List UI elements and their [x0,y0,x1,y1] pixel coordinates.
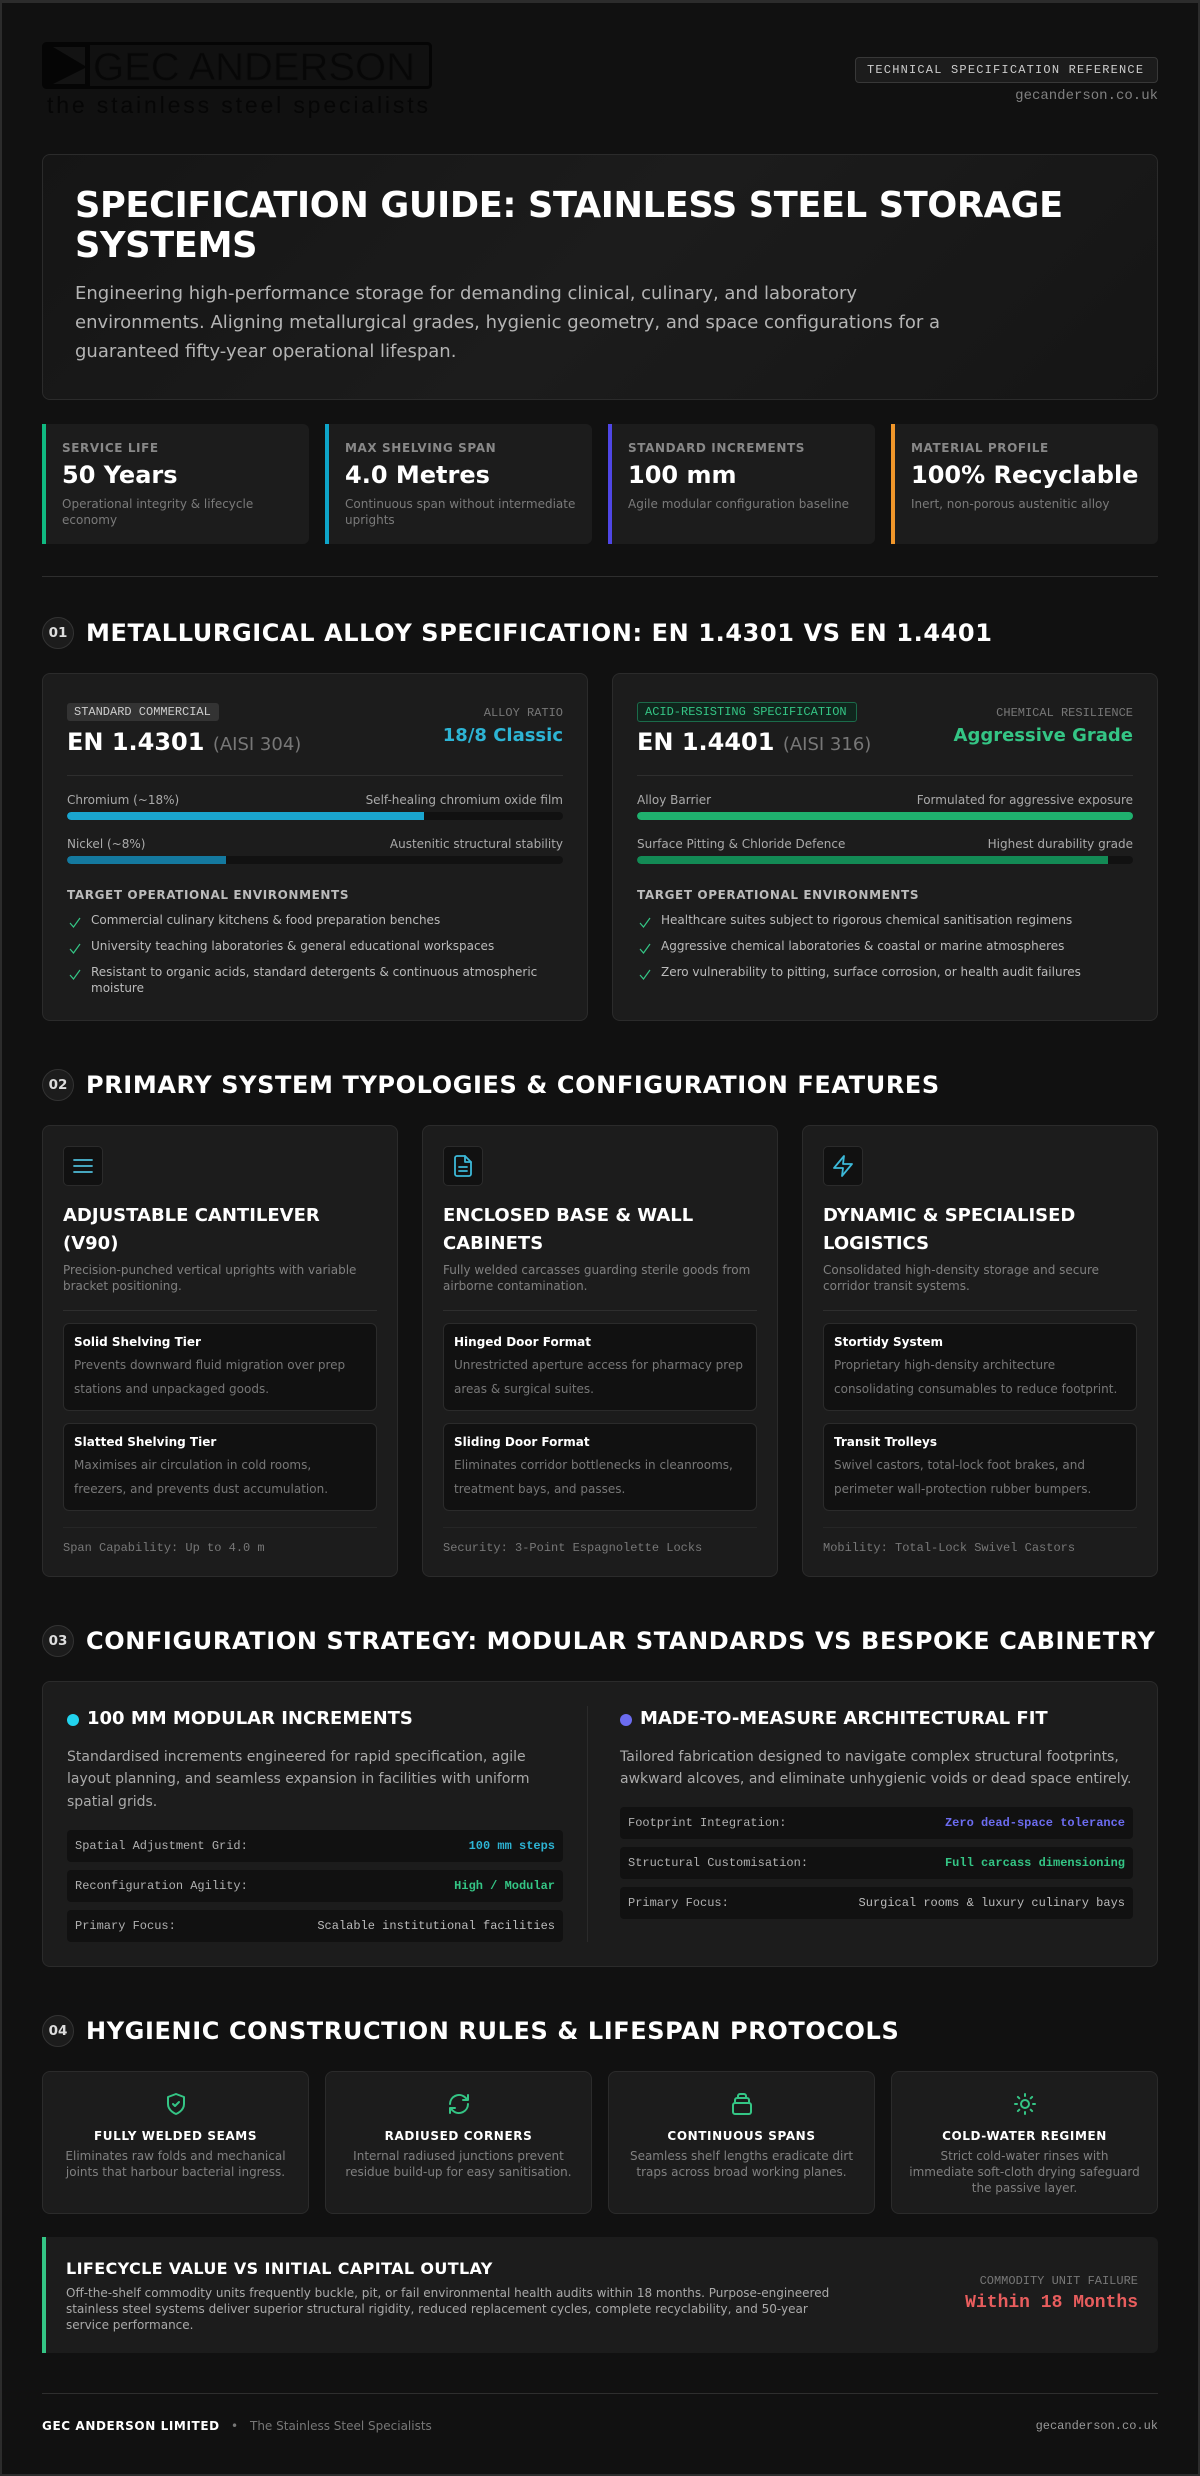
row: primary focus [67,1910,563,1942]
sub-card: solid shelving [63,1323,377,1411]
sub-card: transit trolleys: perimeter wall-protection rubber bumpers. [834,1482,1091,1496]
icon: menu lines [63,1146,103,1186]
footer tagline: The Stainless Steel Specialists [250,2419,432,2433]
panel: EN 1.4301: 18/8 Classic [443,724,563,746]
hero description: Engineering high-performance storage for demanding clinical, culinary, and laboratory [75,282,857,304]
card: continuous spans [608,2071,875,2214]
card: radiused corners: Internal radiused junctions prevent [353,2149,564,2163]
row: reconfiguration: High / Modular [454,1879,555,1893]
card: fully welded seams: joints that harbour bacterial ingress. [66,2165,285,2179]
row: structural [620,1847,1133,1879]
hero title [75,185,1063,266]
panel: EN 1.4401: Aggressive Grade [954,724,1133,746]
bar: alloy barrier: Alloy Barrier [637,793,711,807]
bar: surface pitting [637,837,1133,864]
card description: airborne contamination. [443,1279,588,1293]
sub-card: slatted shelving: Maximises air circulation in cold rooms, [74,1458,311,1472]
sub-card: stortidy: Stortidy System [834,1335,943,1349]
section heading 02: PRIMARY SYSTEM TYPOLOGIES & CONFIGURATION FEATURES [86,1071,940,1099]
bar: surface pitting: Highest durability grade [988,837,1133,851]
sub-card: solid shelving: Prevents downward fluid migration over prep [74,1358,345,1372]
card description [443,1263,750,1293]
card description: Consolidated high-density storage and secure [823,1263,1099,1277]
icon: refresh [449,2094,469,2114]
sub-card: sliding door: Sliding Door Format [454,1435,590,1449]
stat: max shelving span [325,424,592,544]
section heading 03: 03 [49,1633,67,1649]
card description: Fully welded carcasses guarding sterile goods from [443,1263,750,1277]
hero panel [42,154,1158,400]
sub-card: hinged door: Hinged Door Format [454,1335,591,1349]
modular description [67,1748,530,1810]
row: spatial adjustment: Spatial Adjustment Grid: [75,1839,248,1853]
bar: alloy barrier: Formulated for aggressive exposure [917,793,1133,807]
callout text: Off-the-shelf commodity units frequently buckle, pit, or fail environmental health audits within 18 months. Purpose-engineered [66,2286,829,2300]
stat: max shelving span: uprights [345,512,395,526]
chemical resilience: CHEMICAL RESILIENCE [996,706,1133,720]
tag: standard commercial: STANDARD COMMERCIAL [74,705,211,719]
target environments: Zero vulnerability to pitting, surface corrosion, or health audit failures [661,965,1081,979]
sub-card: sliding door [443,1423,757,1511]
stat: standard increments: Agile modular configuration baseline [628,496,849,510]
card title: (V90) [63,1233,118,1254]
callout title: LIFECYCLE VALUE VS INITIAL CAPITAL OUTLAY [66,2259,493,2278]
card title: ADJUSTABLE CANTILEVER [63,1205,320,1226]
sub-card: sliding door: treatment bays, and passes. [454,1482,625,1496]
target environments: moisture [91,981,144,995]
callout stat: Within 18 Months [965,2293,1138,2313]
row: footprint [620,1807,1133,1839]
card title: LOGISTICS [823,1233,929,1254]
stat: service life: Operational integrity & lifecycle [62,496,253,510]
sub-card: transit trolleys: Swivel castors, total-lock foot brakes, and [834,1458,1085,1472]
icon: sun [1014,2093,1036,2115]
sub-card: transit trolleys: Transit Trolleys [834,1435,937,1449]
tag: acid-resisting [637,702,857,722]
hero description: guaranteed fifty-year operational lifespan. [75,340,456,362]
bar: chromium: Self-healing chromium oxide film [366,793,563,807]
footer [42,2419,1158,2433]
card description [63,1263,356,1293]
target environments: Resistant to organic acids, standard detergents & continuous atmospheric [91,965,537,979]
stat: standard increments: STANDARD INCREMENTS [628,441,805,455]
card: cold-water regimen: the passive layer. [972,2181,1077,2195]
footer: • [231,2419,238,2433]
row: primary focus: Primary Focus: [628,1896,729,1910]
target environments: TARGET OPERATIONAL ENVIRONMENTS [637,888,919,902]
bar: chromium: Chromium (~18%) [67,793,179,807]
row: footprint: Footprint Integration: [628,1816,786,1830]
target environments [67,888,537,995]
header website: gecanderson.co.uk [1015,88,1158,104]
card: continuous spans: traps across broad working planes. [636,2165,847,2179]
sub-card: stortidy: Proprietary high-density architecture [834,1358,1055,1372]
callout stat [965,2274,1138,2313]
hero description: environments. Aligning metallurgical grades, hygienic geometry, and space configurations for a [75,312,940,332]
card footer: Security: 3-Point Espagnolette Locks [443,1540,702,1554]
card: radiused corners: RADIUSED CORNERS [385,2129,532,2143]
card description: Precision-punched vertical uprights with variable [63,1263,356,1277]
icon: lightning [823,1146,863,1186]
row: spatial adjustment [67,1830,563,1862]
stat: standard increments: 100 mm [628,461,736,489]
bar: nickel: Austenitic structural stability [390,837,563,851]
column: made to measure [620,1708,1133,1919]
card: continuous spans: Seamless shelf lengths eradicate dirt [630,2149,853,2163]
column: modular [67,1708,563,1942]
row: primary focus: Primary Focus: [75,1919,176,1933]
card: cold-water regimen: COLD-WATER REGIMEN [942,2129,1107,2143]
callout text: stainless steel systems deliver superior structural rigidity, reduced replacement cycles, complete recyclability, and 50-year [66,2302,808,2316]
sub-card: transit trolleys [823,1423,1137,1511]
sub-card: solid shelving: Solid Shelving Tier [74,1335,201,1349]
panel: adjustable cantilever [42,1125,398,1577]
grade name: EN 1.4401 (AISI 316) [637,728,871,756]
made to measure description [620,1748,1131,1787]
made to measure heading: MADE-TO-MEASURE ARCHITECTURAL FIT [640,1708,1048,1729]
modular description: Standardised increments engineered for rapid specification, agile [67,1748,526,1764]
section heading 01: METALLURGICAL ALLOY SPECIFICATION: EN 1.4301 VS EN 1.4401 [86,619,993,647]
row: primary focus [620,1887,1133,1919]
footer website: gecanderson.co.uk [1036,2419,1158,2433]
card description: bracket positioning. [63,1279,182,1293]
bar: nickel [67,837,563,864]
card: fully welded seams [42,2071,309,2214]
bar: chromium [67,793,563,820]
target environments: University teaching laboratories & general educational workspaces [91,939,494,953]
sub-card: slatted shelving: Slatted Shelving Tier [74,1435,216,1449]
card: continuous spans: CONTINUOUS SPANS [667,2129,816,2143]
logo: the stainless steel specialists [47,92,428,118]
section heading 02: 02 [49,1077,67,1093]
bar: alloy barrier [637,793,1133,820]
card: cold-water regimen [891,2071,1158,2214]
panel: EN 1.4301 [42,673,588,1021]
sub-card: stortidy: consolidating consumables to reduce footprint. [834,1382,1117,1396]
footer brand: GEC ANDERSON LIMITED [42,2419,220,2433]
row: reconfiguration: Reconfiguration Agility: [75,1879,248,1893]
card: radiused corners: residue build-up for easy sanitisation. [345,2165,572,2179]
sub-card: solid shelving: stations and unpackaged goods. [74,1382,269,1396]
header badge: TECHNICAL SPECIFICATION REFERENCE [867,63,1144,77]
panel: dynamic logistics [802,1125,1158,1577]
sub-card: hinged door [443,1323,757,1411]
card description [823,1263,1099,1293]
card title: ENCLOSED BASE & WALL [443,1205,693,1226]
row: structural: Full carcass dimensioning [945,1856,1125,1870]
logo [42,42,432,118]
card title [63,1205,320,1254]
card: cold-water regimen: Strict cold-water rinses with [941,2149,1108,2163]
card: fully welded seams: FULLY WELDED SEAMS [94,2129,257,2143]
target environments: TARGET OPERATIONAL ENVIRONMENTS [67,888,349,902]
sub-card: sliding door: Eliminates corridor bottlenecks in cleanrooms, [454,1458,733,1472]
stat: service life: SERVICE LIFE [62,441,159,455]
row: reconfiguration [67,1870,563,1902]
stat: max shelving span: Continuous span without intermediate [345,496,575,510]
row: primary focus: Surgical rooms & luxury culinary bays [859,1896,1125,1910]
sub-card: hinged door: areas & surgical suites. [454,1382,594,1396]
card: radiused corners [325,2071,592,2214]
icon: stacked trays [732,2093,752,2115]
callout text [66,2286,829,2332]
panel: EN 1.4401 [612,673,1158,1021]
row: spatial adjustment: 100 mm steps [469,1839,555,1853]
panel: enclosed cabinets [422,1125,778,1577]
stat: max shelving span: MAX SHELVING SPAN [345,441,496,455]
section heading 04: HYGIENIC CONSTRUCTION RULES & LIFESPAN PROTOCOLS [86,2017,899,2045]
made to measure description: awkward alcoves, and eliminate unhygienic voids or dead space entirely. [620,1771,1131,1787]
stat: material profile: MATERIAL PROFILE [911,441,1049,455]
row: footprint: Zero dead-space tolerance [945,1816,1125,1830]
bar: surface pitting: Surface Pitting & Chloride Defence [637,837,845,851]
callout stat: COMMODITY UNIT FAILURE [980,2274,1138,2288]
panel: configuration strategy [42,1681,1158,1967]
icon: document [443,1146,483,1186]
sub-card: hinged door: Unrestricted aperture access for pharmacy prep [454,1358,743,1372]
tag: acid-resisting: ACID-RESISTING SPECIFICATION [645,705,847,719]
callout: lifecycle value [42,2237,1158,2353]
stat: material profile: 100% Recyclable [911,461,1138,489]
card title [823,1205,1075,1254]
hero title: SPECIFICATION GUIDE: STAINLESS STEEL STORAGE [75,185,1063,226]
target environments: Commercial culinary kitchens & food preparation benches [91,913,440,927]
card title [443,1205,693,1254]
target environments [637,888,1081,980]
stat: service life: economy [62,512,117,526]
stat: service life: 50 Years [62,461,178,489]
row: structural: Structural Customisation: [628,1856,808,1870]
section heading 03: CONFIGURATION STRATEGY: MODULAR STANDARDS VS BESPOKE CABINETRY [86,1627,1156,1655]
sub-card: stortidy [823,1323,1137,1411]
row: primary focus: Scalable institutional facilities [317,1919,555,1933]
logo: GEC ANDERSON [93,46,415,89]
alloy ratio: ALLOY RATIO [484,706,563,720]
sub-card: slatted shelving [63,1423,377,1511]
card title: DYNAMIC & SPECIALISED [823,1205,1075,1226]
target environments: Healthcare suites subject to rigorous chemical sanitisation regimens [661,913,1072,927]
stat: material profile [891,424,1158,544]
header badge [855,57,1158,83]
target environments: Aggressive chemical laboratories & coastal or marine atmospheres [661,939,1064,953]
modular description: spatial grids. [67,1794,157,1810]
grade name: EN 1.4301 (AISI 304) [67,728,301,756]
stat: service life [42,424,309,544]
section heading 01: 01 [49,625,67,641]
stat: standard increments [608,424,875,544]
card footer: Mobility: Total-Lock Swivel Castors [823,1540,1075,1554]
card footer: Span Capability: Up to 4.0 m [63,1540,265,1554]
stat: max shelving span: 4.0 Metres [345,461,490,489]
callout text: service performance. [66,2318,193,2332]
made to measure description: Tailored fabrication designed to navigate complex structural footprints, [620,1748,1119,1764]
card: cold-water regimen: immediate soft-cloth drying safeguard [909,2165,1140,2179]
hero title: SYSTEMS [75,225,257,266]
modular heading: 100 MM MODULAR INCREMENTS [87,1708,413,1729]
bar: nickel: Nickel (~8%) [67,837,145,851]
hero description [75,282,940,362]
modular description: layout planning, and seamless expansion in facilities with uniform [67,1771,530,1787]
stat: material profile: Inert, non-porous austenitic alloy [911,496,1109,510]
icon: shield check [167,2093,185,2115]
sub-card: slatted shelving: freezers, and prevents dust accumulation. [74,1482,328,1496]
card description: corridor transit systems. [823,1279,970,1293]
card title: CABINETS [443,1233,543,1254]
card: fully welded seams: Eliminates raw folds and mechanical [65,2149,286,2163]
section heading 04: 04 [49,2023,67,2039]
